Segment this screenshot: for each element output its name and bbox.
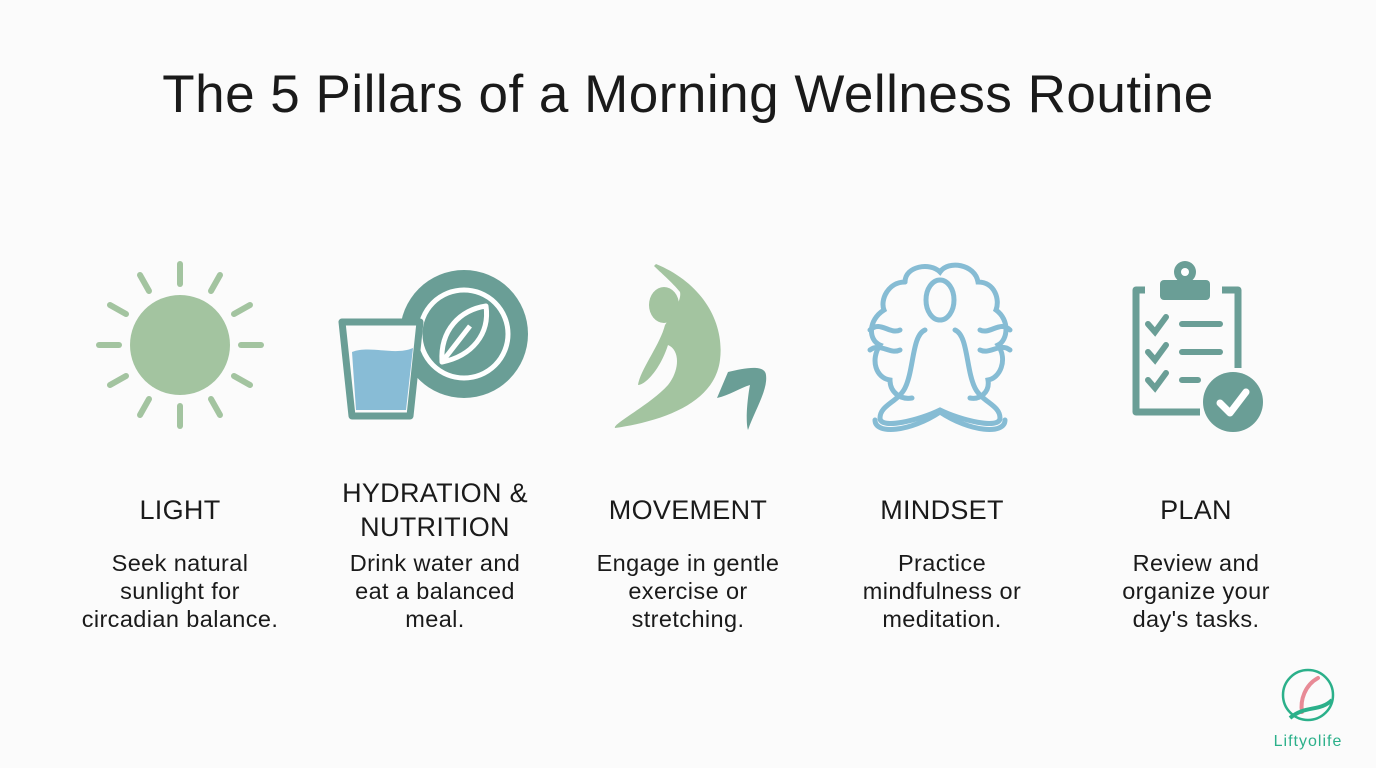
icon: clipboard: [1136, 261, 1263, 432]
column: plan: PLAN: [1160, 495, 1232, 525]
column: mindset: meditation.: [882, 606, 1002, 632]
column: hydration: meal.: [405, 606, 465, 632]
column: plan: [1122, 495, 1270, 632]
column: plan: organize your: [1122, 578, 1270, 604]
icon: water and plate: [342, 270, 528, 416]
column: light: Seek natural: [112, 550, 248, 576]
column: movement: [597, 495, 779, 632]
column: hydration: eat a balanced: [355, 578, 515, 604]
column: hydration: HYDRATION &: [342, 478, 528, 508]
column: light: LIGHT: [139, 495, 220, 525]
column: movement: stretching.: [632, 606, 744, 632]
icon: sun: [99, 264, 261, 426]
column: mindset: mindfulness or: [863, 578, 1021, 604]
logo: Liftyolife: [1274, 733, 1342, 750]
title: The 5 Pillars of a Morning Wellness Routine: [162, 65, 1214, 124]
column: light: sunlight for: [120, 578, 240, 604]
logo: [1274, 670, 1342, 750]
column: light: circadian balance.: [82, 606, 278, 632]
icon: movement figure: [615, 264, 766, 430]
column: plan: Review and: [1133, 550, 1259, 576]
column: movement: exercise or: [628, 578, 748, 604]
column: mindset: MINDSET: [880, 495, 1004, 525]
column: plan: day's tasks.: [1133, 606, 1259, 632]
column: mindset: Practice: [898, 550, 986, 576]
column: light: [82, 495, 278, 632]
column: movement: Engage in gentle: [597, 550, 779, 576]
column: hydration: [342, 478, 528, 632]
column: movement: MOVEMENT: [609, 495, 767, 525]
icon: mindset brain meditation: [870, 265, 1010, 429]
column: mindset: [863, 495, 1021, 632]
column: hydration: NUTRITION: [360, 512, 510, 542]
column: hydration: Drink water and: [350, 550, 520, 576]
